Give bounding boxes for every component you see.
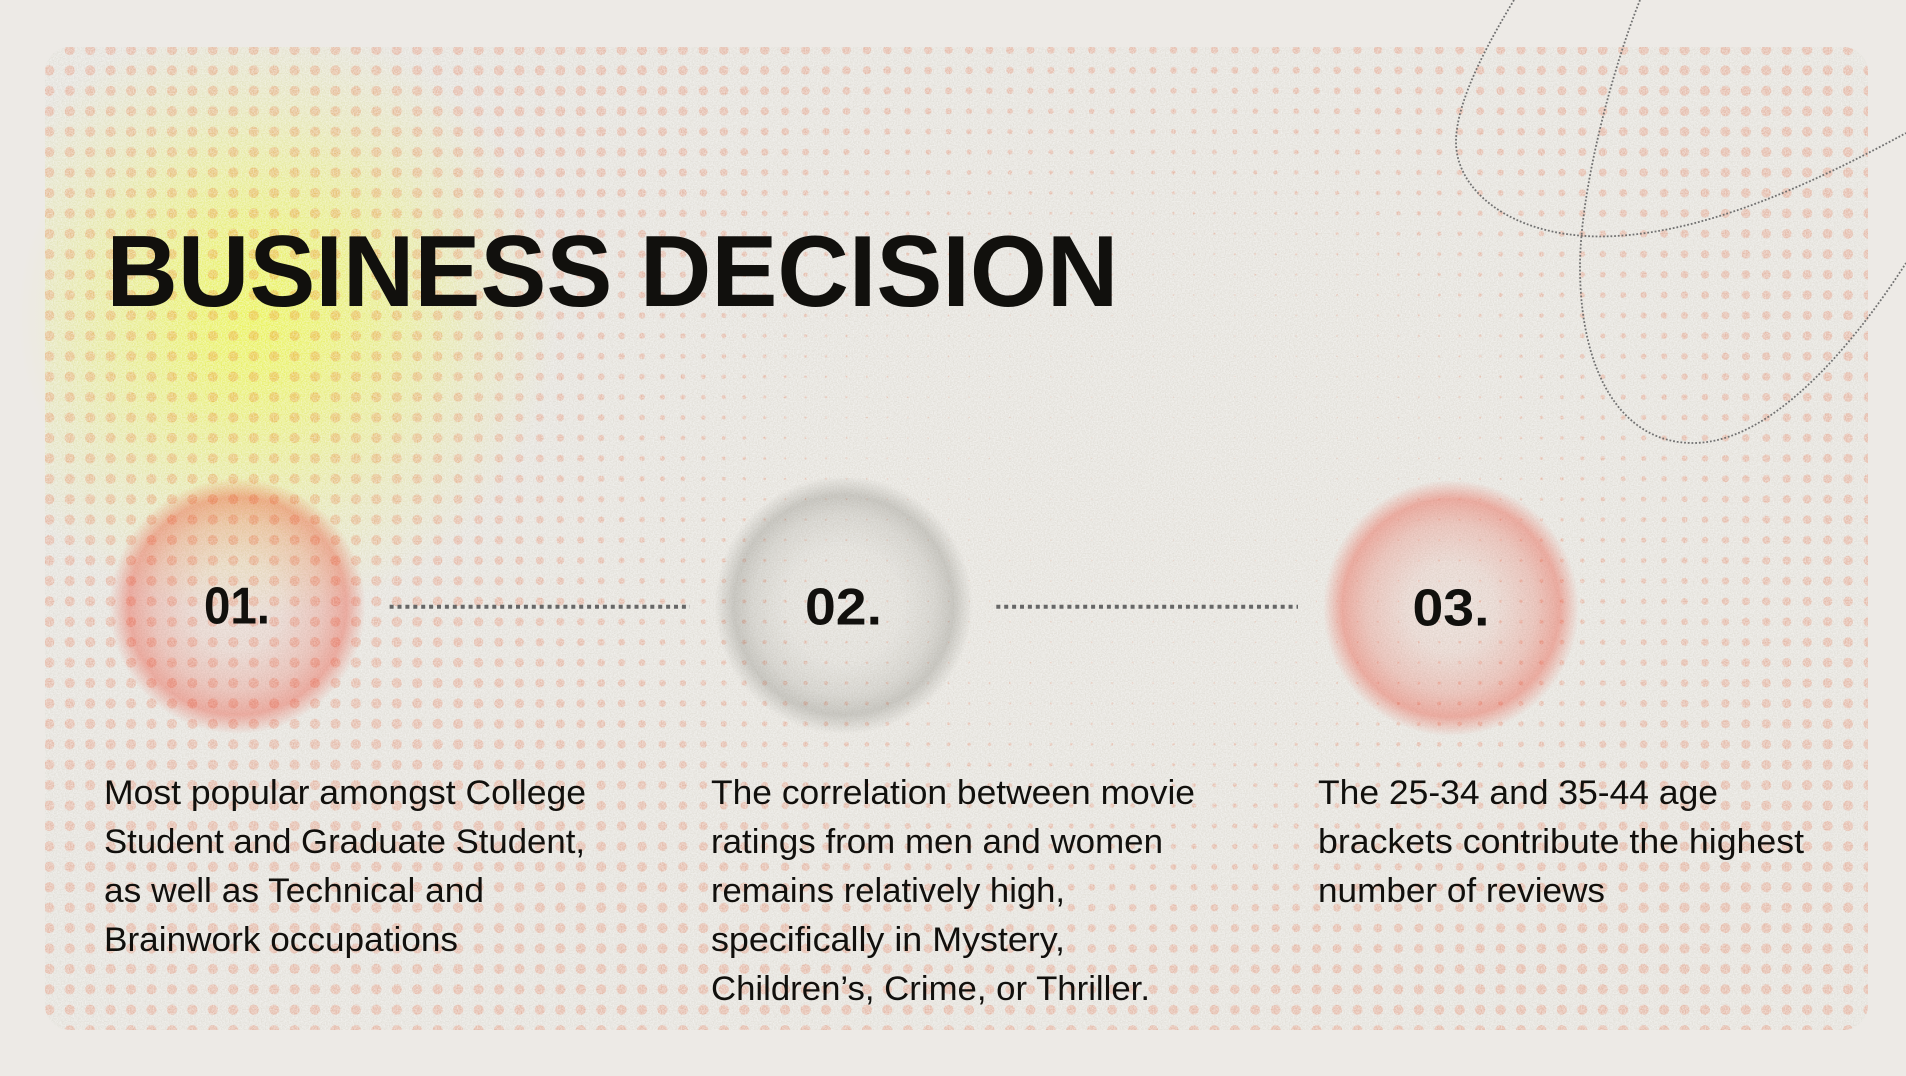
step 1 circle xyxy=(110,478,366,734)
circle: gray blurred ring xyxy=(714,476,972,734)
curve: upper loop xyxy=(1456,0,1906,236)
circle: red blurred ring xyxy=(1323,480,1579,736)
decorative dotted curves xyxy=(1456,0,1906,443)
number 01: 01. xyxy=(204,578,270,636)
circle: red blurred ring xyxy=(110,478,366,734)
number 03: 03. xyxy=(1412,580,1490,638)
text block: step 1: Brainwork occupations xyxy=(104,921,458,959)
text block: step 3: The 25-34 and 35-44 age xyxy=(1318,774,1718,812)
curve: lower loop xyxy=(1580,0,1906,443)
step 3 circle xyxy=(1323,480,1579,736)
number 02: 02. xyxy=(805,578,882,636)
text block: step 3: brackets contribute the highest xyxy=(1318,823,1805,861)
text block: step 2 xyxy=(711,774,1195,1008)
text block: step 2: remains relatively high, xyxy=(711,872,1065,910)
text block: step 2: The correlation between movie xyxy=(711,774,1195,812)
text block: step 1: as well as Technical and xyxy=(104,872,484,910)
text block: step 2: ratings from men and women xyxy=(711,823,1163,861)
yellow glow xyxy=(45,47,537,596)
connector 2 xyxy=(996,605,1298,609)
text block: step 3: number of reviews xyxy=(1318,872,1605,910)
faint yellow glow outside panel xyxy=(17,77,497,557)
text block: step 1: Most popular amongst College xyxy=(104,774,586,812)
text block: step 1: Student and Graduate Student, xyxy=(104,823,585,861)
step 2 circle xyxy=(714,476,972,734)
text block: step 1 xyxy=(104,774,586,959)
text block: step 3 xyxy=(1318,774,1805,910)
title: BUSINESS DECISION xyxy=(106,216,1118,328)
text block: step 2: Children’s, Crime, or Thriller. xyxy=(711,970,1150,1008)
connector 1 xyxy=(390,605,690,609)
text block: step 2: specifically in Mystery, xyxy=(711,921,1065,959)
